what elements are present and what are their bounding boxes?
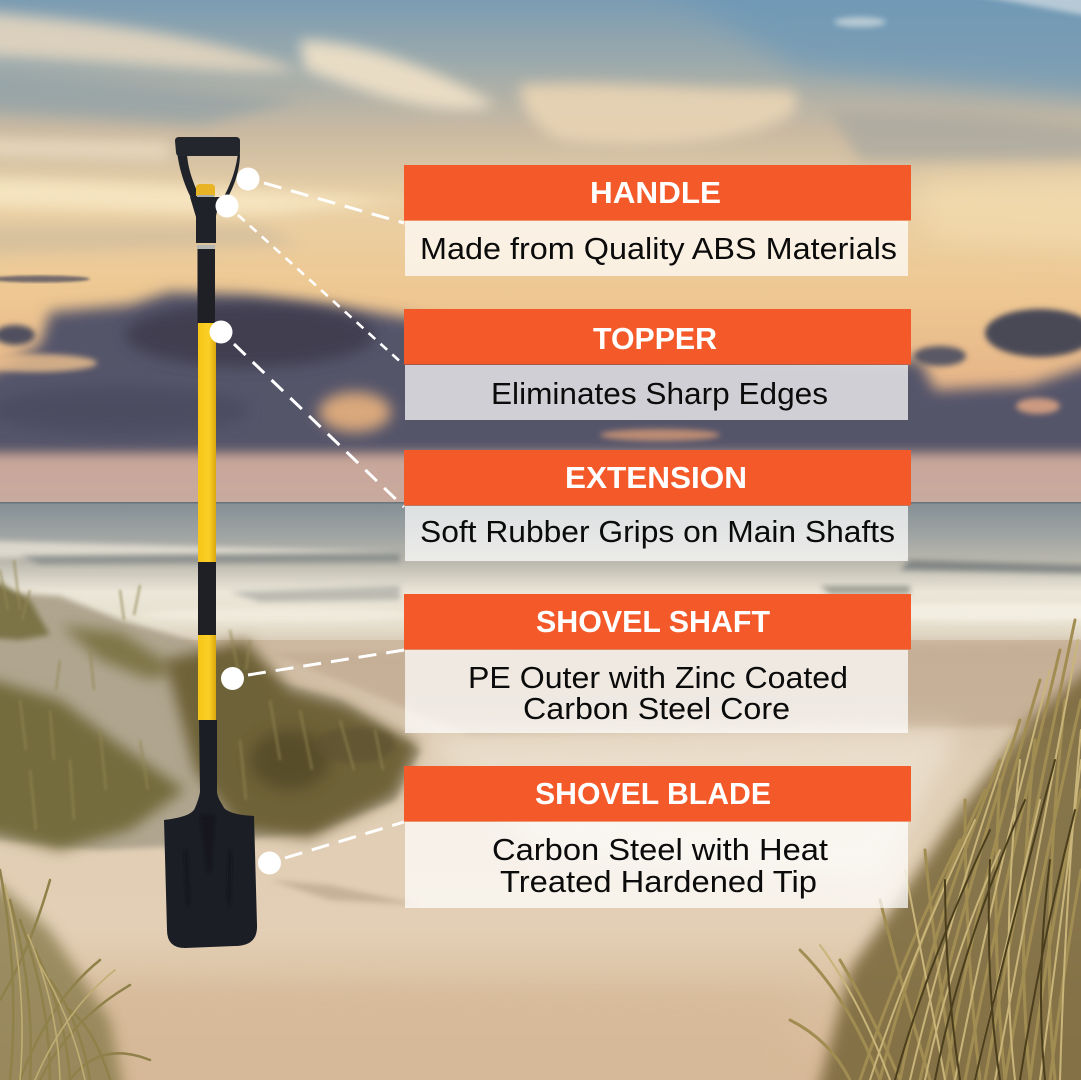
panel: shovel shaft — [404, 594, 911, 733]
panel: extension — [404, 450, 911, 561]
background: beach sand — [0, 640, 1081, 1080]
shovel: upper black grip — [198, 249, 215, 323]
shovel — [164, 137, 257, 948]
callout connector lines — [234, 183, 404, 858]
panel: handle — [404, 165, 911, 276]
panel: topper — [404, 309, 911, 420]
shovel: yellow topper — [196, 184, 215, 196]
background: lower-left beach grass — [0, 850, 150, 1080]
panel: shovel shaft: SHOVEL SHAFT — [536, 604, 770, 639]
panel: shovel blade: SHOVEL BLADE — [535, 776, 771, 811]
marker dots — [210, 168, 281, 874]
background: left dune with grass — [0, 560, 420, 850]
shovel: blade — [164, 720, 257, 948]
panel: shovel blade: Carbon Steel with Heat — [492, 832, 828, 867]
background: sky — [0, 0, 1081, 510]
panel: shovel shaft: Carbon Steel Core — [523, 691, 790, 726]
background: sea — [0, 502, 1081, 647]
panel: extension: EXTENSION — [565, 460, 747, 495]
panel: shovel shaft: PE Outer with Zinc Coated — [468, 660, 848, 695]
background: right beach grass — [790, 620, 1081, 1080]
panel: handle: Made from Quality ABS Materials — [420, 231, 897, 266]
shovel: black coupler — [198, 562, 216, 635]
panel: topper: TOPPER — [593, 321, 717, 356]
shovel: D-handle grip — [175, 137, 240, 212]
shovel: handle collar — [190, 197, 220, 243]
panel: shovel blade: Treated Hardened Tip — [500, 864, 817, 899]
panel: extension: Soft Rubber Grips on Main Shafts — [420, 514, 895, 549]
panel: topper: Eliminates Sharp Edges — [491, 376, 828, 411]
shovel: extension yellow shaft — [198, 323, 216, 562]
panel: shovel blade — [404, 766, 911, 908]
storm cloud bank — [0, 292, 1081, 455]
shovel: lower yellow shaft — [198, 635, 216, 720]
panel: handle: HANDLE — [590, 175, 721, 210]
